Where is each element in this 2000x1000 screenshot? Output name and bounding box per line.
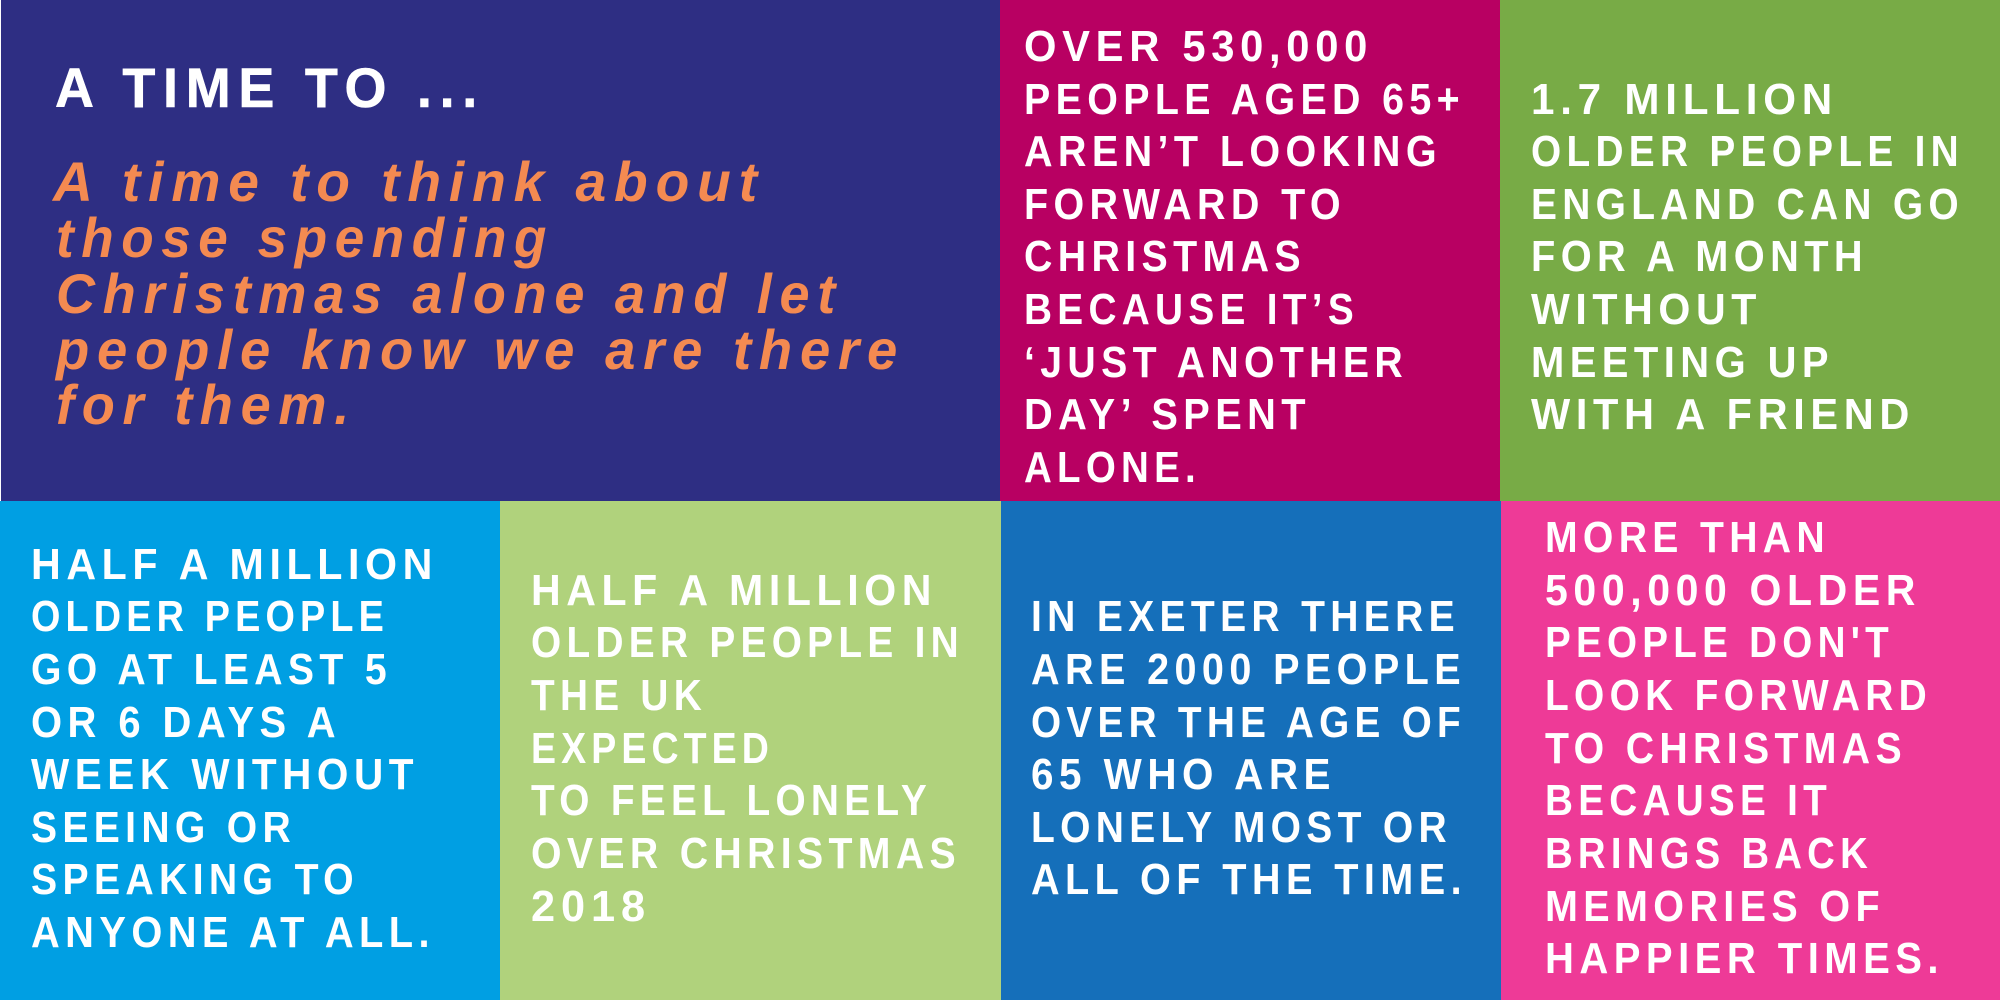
text block: orange message: those spending xyxy=(56,206,554,269)
text block: blue statistic: ARE 2000 PEOPLE xyxy=(1031,645,1466,694)
heading: a time to: A TIME TO ... xyxy=(55,56,485,119)
text block: sky blue statistic: OLDER PEOPLE xyxy=(31,592,389,641)
text block: orange message xyxy=(51,150,905,436)
text block: magenta statistic: PEOPLE AGED 65+ xyxy=(1024,75,1465,124)
text block: sky blue statistic: SPEAKING TO xyxy=(31,855,359,904)
text block: light green statistic: THE UK xyxy=(531,671,707,720)
text block: sky blue statistic: HALF A MILLION xyxy=(31,540,438,589)
text block: light green statistic xyxy=(531,566,964,931)
text block: blue statistic xyxy=(1031,592,1467,904)
text block: light green statistic: EXPECTED xyxy=(531,724,774,773)
text block: orange message: A time to think about xyxy=(51,150,765,213)
text block: sky blue statistic: OR 6 DAYS A xyxy=(31,698,341,747)
panel: over 530,000 people aged 65+ xyxy=(1000,0,1501,501)
panel: a time to intro xyxy=(1,0,1001,501)
text block: light green statistic: OLDER PEOPLE IN xyxy=(531,618,964,667)
text block: magenta statistic xyxy=(1024,22,1465,492)
text block: green statistic: WITHOUT xyxy=(1531,285,1762,334)
text block: orange message: people know we are there xyxy=(54,318,905,381)
text block: magenta statistic: BECAUSE IT’S xyxy=(1024,285,1359,334)
text block: sky blue statistic: ANYONE AT ALL. xyxy=(31,908,435,957)
text block: light green statistic: 2018 xyxy=(531,882,651,931)
text block: pink statistic: PEOPLE DON'T xyxy=(1545,618,1894,667)
text block: pink statistic: LOOK FORWARD xyxy=(1545,671,1932,720)
panel: in exeter xyxy=(1001,501,1501,1000)
text block: pink statistic: MORE THAN xyxy=(1545,513,1830,562)
text block: pink statistic: MEMORIES OF xyxy=(1545,882,1885,931)
text block: blue statistic: 65 WHO ARE xyxy=(1031,750,1336,799)
text block: magenta statistic: ALONE. xyxy=(1024,443,1201,492)
text block: green statistic: WITH A FRIEND xyxy=(1531,390,1915,439)
text block: sky blue statistic: SEEING OR xyxy=(31,803,296,852)
text block: green statistic: 1.7 MILLION xyxy=(1531,75,1838,124)
text block: magenta statistic: OVER 530,000 xyxy=(1024,22,1373,71)
text block: orange message: Christmas alone and let xyxy=(56,262,843,325)
text block: sky blue statistic: GO AT LEAST 5 xyxy=(31,645,392,694)
panel: half a million lonely over christmas xyxy=(500,501,1001,1000)
text block: light green statistic: TO FEEL LONELY xyxy=(531,776,932,825)
text block: pink statistic: 500,000 OLDER xyxy=(1545,566,1921,615)
text block: green statistic xyxy=(1531,75,1964,439)
text block: green statistic: MEETING UP xyxy=(1531,338,1834,387)
text block: pink statistic: BECAUSE IT xyxy=(1545,776,1832,825)
text block: blue statistic: OVER THE AGE OF xyxy=(1031,698,1466,747)
text block: magenta statistic: AREN’T LOOKING xyxy=(1024,127,1442,176)
panel: 1.7 million older people xyxy=(1500,0,2000,501)
text block: magenta statistic: DAY’ SPENT xyxy=(1024,390,1311,439)
text block: blue statistic: LONELY MOST OR xyxy=(1031,803,1452,852)
text block: sky blue statistic: WEEK WITHOUT xyxy=(31,750,419,799)
text block: magenta statistic: ‘JUST ANOTHER xyxy=(1024,338,1408,387)
text block: blue statistic: ALL OF THE TIME. xyxy=(1031,855,1467,904)
text block: green statistic: FOR A MONTH xyxy=(1531,232,1868,281)
panel: half a million go days without speaking xyxy=(0,501,500,1000)
text block: magenta statistic: FORWARD TO xyxy=(1024,180,1346,229)
text block: blue statistic: IN EXETER THERE xyxy=(1031,592,1460,641)
text block: light green statistic: HALF A MILLION xyxy=(531,566,937,615)
text block: sky blue statistic xyxy=(31,540,438,957)
text block: orange message: for them. xyxy=(56,373,357,436)
panel: more than 500,000 older people xyxy=(1501,501,2000,1000)
text block: magenta statistic: CHRISTMAS xyxy=(1024,232,1306,281)
text block: pink statistic: BRINGS BACK xyxy=(1545,829,1873,878)
text block: pink statistic: TO CHRISTMAS xyxy=(1545,724,1907,773)
text block: light green statistic: OVER CHRISTMAS xyxy=(531,829,961,878)
text block: pink statistic: HAPPIER TIMES. xyxy=(1545,934,1944,983)
text block: pink statistic xyxy=(1545,513,1944,983)
